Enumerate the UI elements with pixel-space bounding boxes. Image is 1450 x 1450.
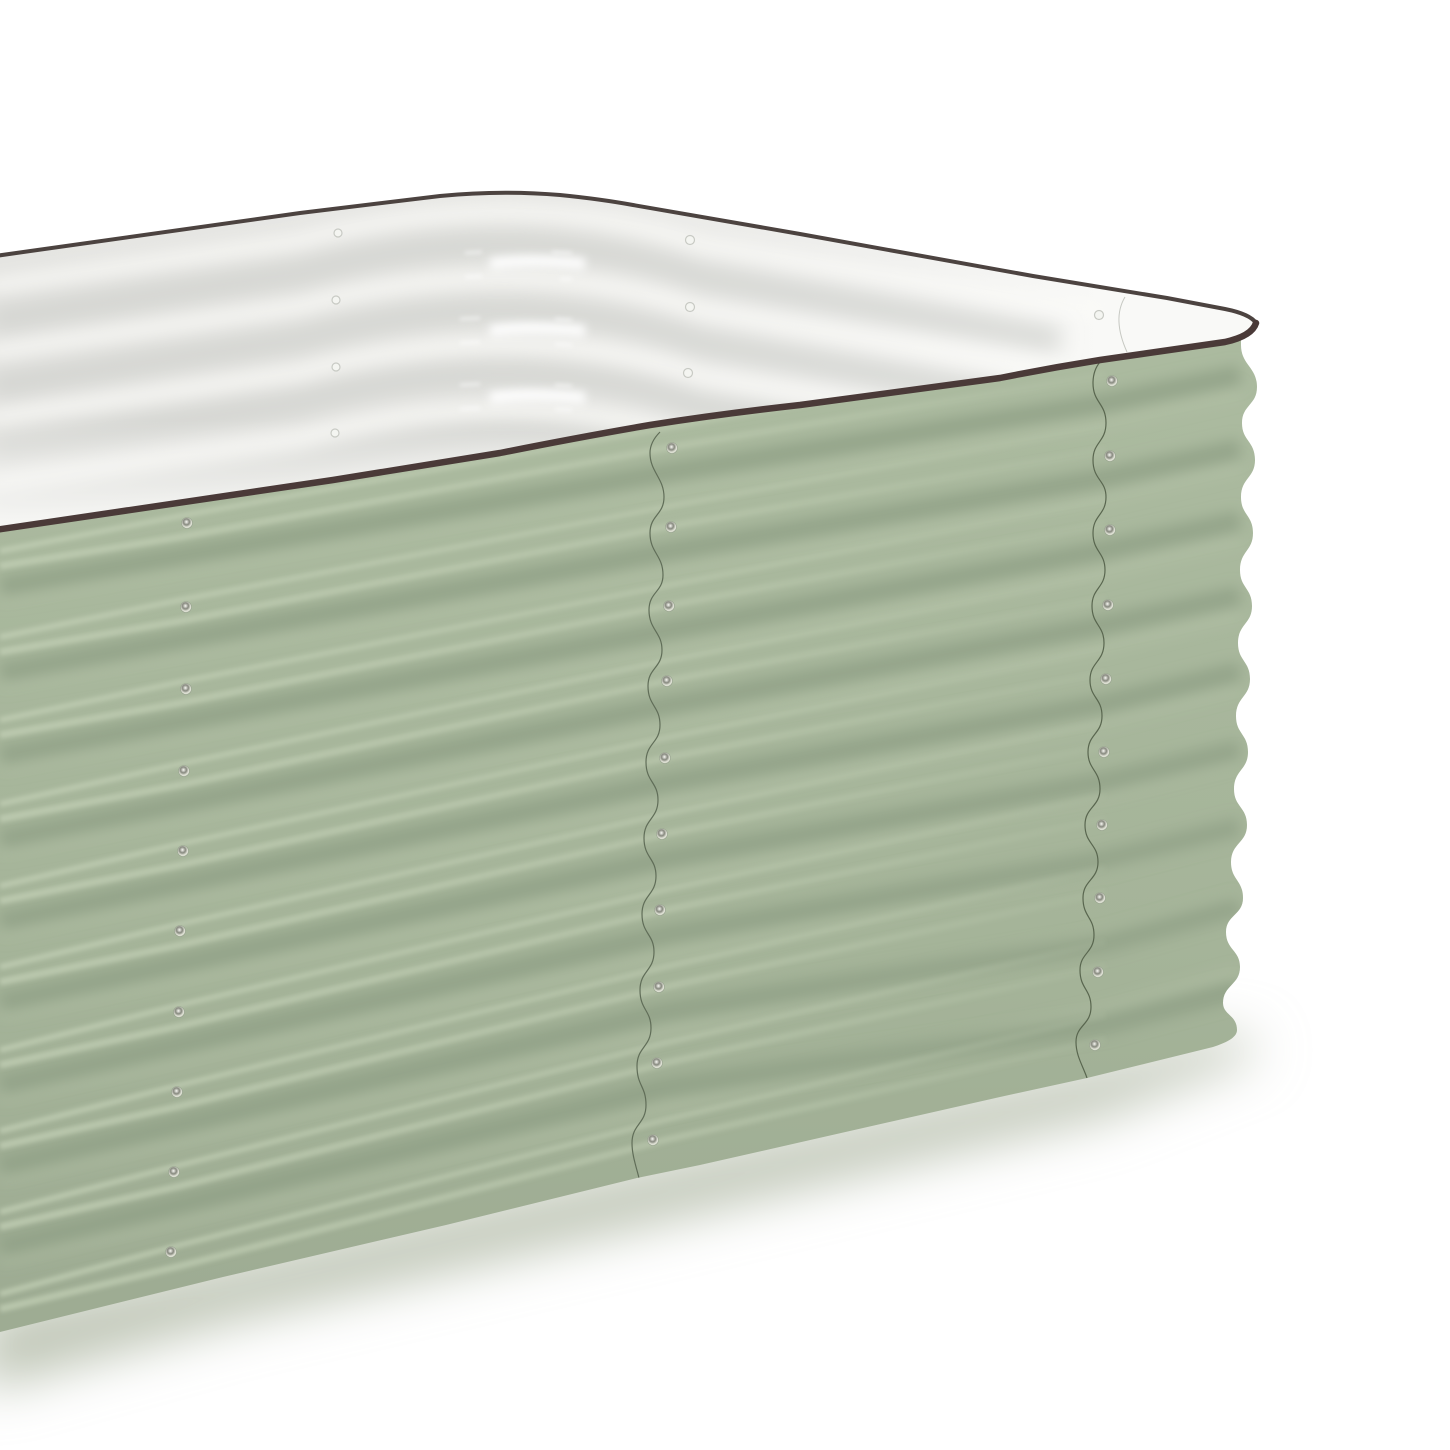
rivets middle column (648, 442, 678, 1146)
faint light corrugation bands (0, 391, 1240, 1258)
interior bright corrugations (0, 208, 706, 450)
ground shadow (0, 1035, 1265, 1390)
interior liner of the bed (0, 194, 1128, 526)
interior specular highlights (490, 261, 585, 398)
interior shaded corrugations (0, 245, 1060, 514)
panel seam right (1076, 362, 1106, 1078)
interior specular flecks (462, 250, 570, 386)
highlight lines A (0, 417, 976, 1297)
interior lower fade to white (0, 448, 419, 526)
panel seam middle (632, 432, 664, 1178)
highlight lines B (0, 428, 904, 1312)
dark rim around the top of the bed (0, 193, 1256, 530)
rivets right column (1090, 376, 1118, 1050)
back rim (0, 193, 1256, 323)
interior rivets (331, 229, 1104, 437)
front rim (0, 323, 1256, 530)
interior corner seam (1119, 297, 1127, 352)
rivets left column (166, 518, 192, 1258)
green corrugated outer wall (0, 330, 1265, 1340)
dark corrugation valleys (0, 375, 1240, 1248)
